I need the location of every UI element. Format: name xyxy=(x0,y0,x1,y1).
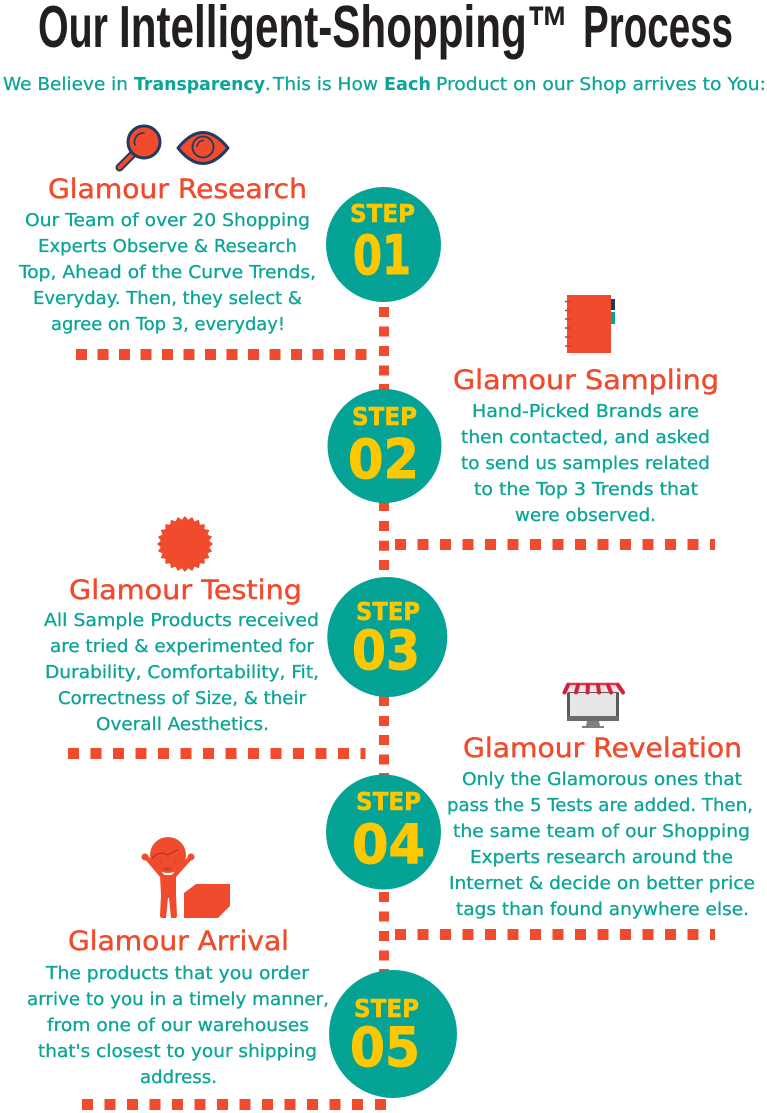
panel: Glamour Revelation xyxy=(447,684,755,920)
step 05 badge: 05 xyxy=(350,1016,420,1079)
body text: then contacted, and asked xyxy=(461,428,710,448)
body text: The products that you order xyxy=(45,964,310,984)
icon: seal badge xyxy=(157,516,213,572)
step 01 badge xyxy=(326,187,441,302)
panel: Glamour Sampling xyxy=(453,295,719,526)
step 02 badge xyxy=(328,389,442,503)
body text xyxy=(461,402,710,526)
body text: Only the Glamorous ones that xyxy=(462,770,742,790)
panel: Glamour Arrival xyxy=(27,837,329,1088)
panel: Glamour Testing xyxy=(44,516,319,735)
step 02 badge: STEP xyxy=(352,402,417,431)
step 05 badge xyxy=(329,970,457,1098)
body text: that's closest to your shipping xyxy=(38,1042,317,1062)
step 03 badge xyxy=(327,577,447,697)
dotted connector lines xyxy=(68,307,715,1110)
step 04 badge: 04 xyxy=(352,813,425,876)
body text: arrive to you in a timely manner, xyxy=(27,990,329,1010)
body text xyxy=(447,770,755,920)
body text: Correctness of Size, & their xyxy=(58,689,307,709)
body text xyxy=(18,211,316,335)
step 05 badge: STEP xyxy=(354,994,419,1023)
body text: to the Top 3 Trends that xyxy=(474,480,698,500)
body text: tags than found anywhere else. xyxy=(456,900,749,920)
step 04 badge: STEP xyxy=(356,787,421,816)
body text: Our Team of over 20 Shopping xyxy=(25,211,310,231)
body text: were observed. xyxy=(515,506,656,526)
body text: from one of our warehouses xyxy=(47,1016,309,1036)
body text: to send us samples related xyxy=(461,454,710,474)
body text: pass the 5 Tests are added. Then, xyxy=(447,796,753,816)
body text xyxy=(27,964,329,1088)
body text: are tried & experimented for xyxy=(50,637,315,657)
heading: Glamour Sampling xyxy=(453,365,719,396)
icon: parcel box xyxy=(184,884,230,918)
icon: cheering person xyxy=(142,837,194,918)
subtitle: Each xyxy=(384,75,431,95)
body text: All Sample Products received xyxy=(44,611,319,631)
icon: eye xyxy=(178,132,228,164)
body text: the same team of our Shopping xyxy=(453,822,750,842)
subtitle: Transparency xyxy=(134,75,266,95)
body text: Top, Ahead of the Curve Trends, xyxy=(18,263,316,283)
subtitle: This is How xyxy=(272,75,378,95)
body text: Experts research around the xyxy=(470,848,733,868)
body text: address. xyxy=(140,1068,217,1088)
step 01 badge: 01 xyxy=(353,224,411,287)
heading: Glamour Testing xyxy=(69,575,302,606)
body text: Durability, Comfortability, Fit, xyxy=(45,663,319,683)
body text: Hand-Picked Brands are xyxy=(472,402,699,422)
body text: Everyday. Then, they select & xyxy=(33,289,302,309)
step 01 badge: STEP xyxy=(350,199,415,228)
step 02 badge: 02 xyxy=(348,428,419,491)
step 04 badge xyxy=(326,774,441,890)
heading: Glamour Research xyxy=(48,174,307,205)
body text xyxy=(44,611,319,735)
subtitle: . xyxy=(265,75,271,95)
icon: magnifying glass xyxy=(120,126,160,168)
panel: Glamour Research xyxy=(18,126,316,335)
subtitle: Product on our Shop arrives to You: xyxy=(436,75,766,95)
step 03 badge: STEP xyxy=(356,597,420,626)
body text: Internet & decide on better price xyxy=(449,874,755,894)
body text: Experts Observe & Research xyxy=(38,237,297,257)
icon: notebook xyxy=(565,295,615,353)
heading: Glamour Arrival xyxy=(68,926,289,957)
subtitle: We Believe in xyxy=(3,75,128,95)
subtitle xyxy=(3,75,766,95)
body text: Overall Aesthetics. xyxy=(96,715,269,735)
step 03 badge: 03 xyxy=(352,619,420,682)
body text: agree on Top 3, everyday! xyxy=(51,315,285,335)
icon: shop monitor xyxy=(563,684,625,728)
heading: Glamour Revelation xyxy=(463,733,742,764)
